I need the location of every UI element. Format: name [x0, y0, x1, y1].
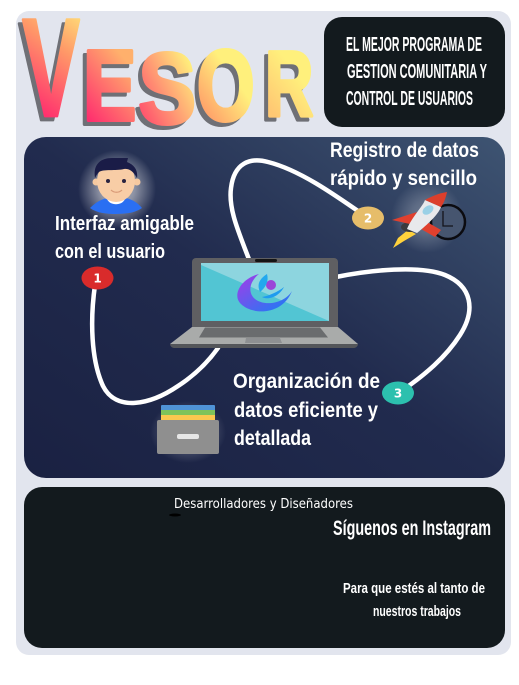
text: stay informed: nuestros trabajos	[373, 603, 461, 620]
icon: rocket and clock	[391, 181, 465, 253]
text: Registro de datos: Registro de datos	[330, 139, 479, 162]
title: Vesor logotype	[22, 0, 313, 146]
text: Organización de datos: Organización de	[233, 370, 380, 393]
text: Organización de datos	[233, 370, 380, 450]
badge 2: 2	[364, 212, 372, 226]
panel: footer	[24, 487, 505, 648]
logo: crescent	[237, 274, 292, 311]
badge 3: 3	[394, 386, 402, 400]
icon: laptop	[170, 258, 358, 348]
icon: file drawer	[150, 401, 226, 463]
title: Vesor logotype: E	[83, 31, 136, 142]
badge 3	[382, 382, 414, 404]
title: Vesor logotype: S	[138, 33, 196, 144]
badge 1: 1	[93, 272, 102, 286]
icon: user avatar	[78, 150, 156, 228]
text: Registro de datos	[330, 139, 479, 190]
text: Registro de datos: rápido y sencillo	[330, 167, 477, 190]
title: Vesor logotype: O	[197, 29, 255, 142]
text: Organización de datos: detallada	[234, 427, 311, 450]
badge 2	[352, 206, 384, 230]
connector curve	[92, 160, 469, 403]
text: stay informed	[343, 580, 485, 620]
text: Interfaz amigable: con el usuario	[55, 241, 165, 263]
text: Interfaz amigable	[55, 213, 194, 263]
text: Interfaz amigable: Interfaz amigable	[55, 213, 194, 235]
text: developers: Desarrolladores y Diseñadores	[174, 497, 353, 512]
text: Organización de datos: datos eficiente y	[234, 399, 378, 422]
title: Vesor logotype: R	[265, 33, 313, 137]
tagline box	[324, 17, 505, 127]
badge 1	[82, 266, 114, 290]
panel: features	[24, 137, 505, 478]
